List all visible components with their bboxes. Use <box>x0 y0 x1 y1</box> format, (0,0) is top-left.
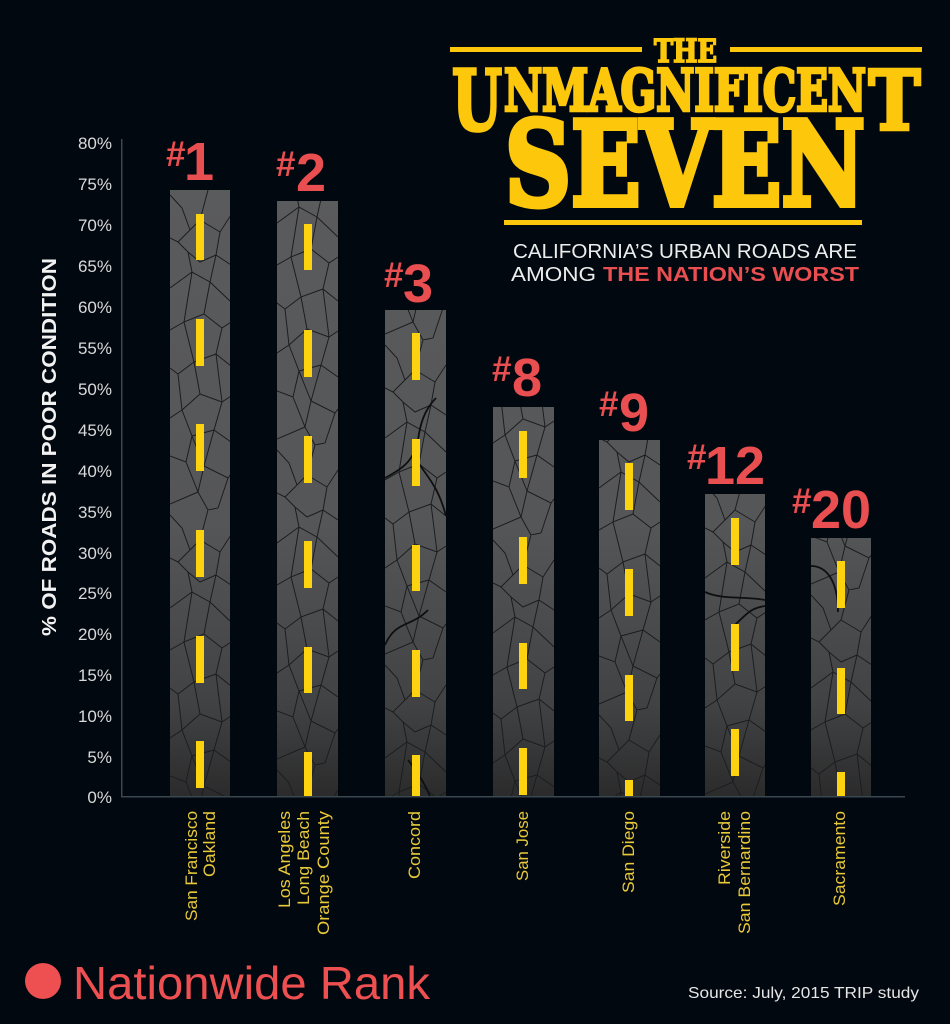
rank #1 <box>166 132 214 192</box>
y-axis tick labels: 75% <box>78 175 112 194</box>
rank #3: # <box>384 256 403 295</box>
source note: Source: July, 2015 TRIP study <box>688 985 919 1002</box>
label: Concord: Concord <box>406 811 424 879</box>
title: UNMAGNIFICENT <box>452 52 920 150</box>
rank #1: 1 <box>184 132 214 192</box>
y-axis tick labels: 30% <box>78 544 112 563</box>
y-axis tick labels <box>78 134 112 807</box>
y-axis tick labels: 80% <box>78 134 112 153</box>
rank #2 <box>276 143 326 203</box>
y-axis title: % OF ROADS IN POOR CONDITION <box>39 258 61 636</box>
title: UNMAGNIFICENT: U <box>452 52 502 150</box>
label: Los Angeles Long Beach Orange County <box>276 810 333 935</box>
rank #20: # <box>792 482 811 521</box>
label: Los Angeles Long Beach Orange County: Long Beach <box>295 811 313 905</box>
y-axis tick labels: 25% <box>78 584 112 603</box>
y-axis tick labels: 40% <box>78 462 112 481</box>
bar: Los Angeles <box>277 201 338 796</box>
bar: Riverside San Bernardino <box>705 494 765 796</box>
label: Riverside San Bernardino <box>716 811 754 934</box>
title: THE with rules <box>450 32 922 70</box>
y-axis tick labels: 10% <box>78 707 112 726</box>
rank #12: 12 <box>705 436 765 496</box>
rank #8 <box>492 348 542 408</box>
bar: San Francisco Oakland <box>170 190 230 796</box>
y-axis tick labels: 65% <box>78 257 112 276</box>
title block <box>450 32 922 233</box>
label: Riverside San Bernardino: Riverside <box>716 811 734 885</box>
rank #2: 2 <box>296 143 326 203</box>
label: San Francisco Oakland: San Francisco <box>183 811 201 921</box>
y-axis tick labels: 35% <box>78 503 112 522</box>
axes <box>121 139 905 798</box>
rank #9: # <box>599 385 618 424</box>
label: San Jose: San Jose <box>514 811 532 881</box>
label: Los Angeles Long Beach Orange County: Los Angeles <box>276 811 294 908</box>
rank #8: 8 <box>512 348 542 408</box>
y-axis tick labels: 45% <box>78 421 112 440</box>
title underline <box>504 220 862 225</box>
y-axis tick labels: 55% <box>78 339 112 358</box>
title: SEVEN: SEVEN <box>505 97 865 233</box>
rank #2: # <box>276 145 295 184</box>
y-axis tick labels: 15% <box>78 666 112 685</box>
subtitle: CALIFORNIA’S URBAN ROADS ARE <box>513 240 857 263</box>
bar: Sacramento <box>811 538 871 796</box>
rank #12: # <box>687 438 706 477</box>
subtitle <box>511 240 860 286</box>
rank #1: # <box>166 135 185 174</box>
bar: San Diego <box>599 440 660 796</box>
rank #9: 9 <box>619 383 649 443</box>
label: San Francisco Oakland: Oakland <box>201 811 219 877</box>
rank #9 <box>599 383 649 443</box>
y-axis tick labels: 50% <box>78 380 112 399</box>
y-axis tick labels: 5% <box>87 748 112 767</box>
rank #3: 3 <box>403 254 433 314</box>
title: UNMAGNIFICENT: T <box>868 54 920 150</box>
y-axis tick labels: 0% <box>87 788 112 807</box>
label: Riverside San Bernardino: San Bernardino <box>736 811 754 934</box>
rank #20: 20 <box>811 480 871 540</box>
city labels <box>183 810 849 935</box>
bar: Concord <box>385 310 446 796</box>
label: Los Angeles Long Beach Orange County: Orange County <box>315 810 333 935</box>
legend dot <box>25 963 61 999</box>
label: Sacramento: Sacramento <box>831 811 849 906</box>
rank #8: # <box>492 350 511 389</box>
y-axis tick labels: 60% <box>78 298 112 317</box>
legend: Nationwide Rank: Nationwide Rank <box>73 957 431 1009</box>
rank #3 <box>384 254 433 314</box>
bar: San Jose <box>493 407 554 796</box>
y-axis tick labels: 20% <box>78 625 112 644</box>
y-axis tick labels: 70% <box>78 216 112 235</box>
label: San Francisco Oakland <box>183 811 219 921</box>
subtitle: AMONG <box>511 263 596 286</box>
label: San Diego: San Diego <box>620 811 638 893</box>
subtitle: THE NATION’S WORST <box>603 263 860 286</box>
title: THE with rules: THE <box>654 32 717 70</box>
